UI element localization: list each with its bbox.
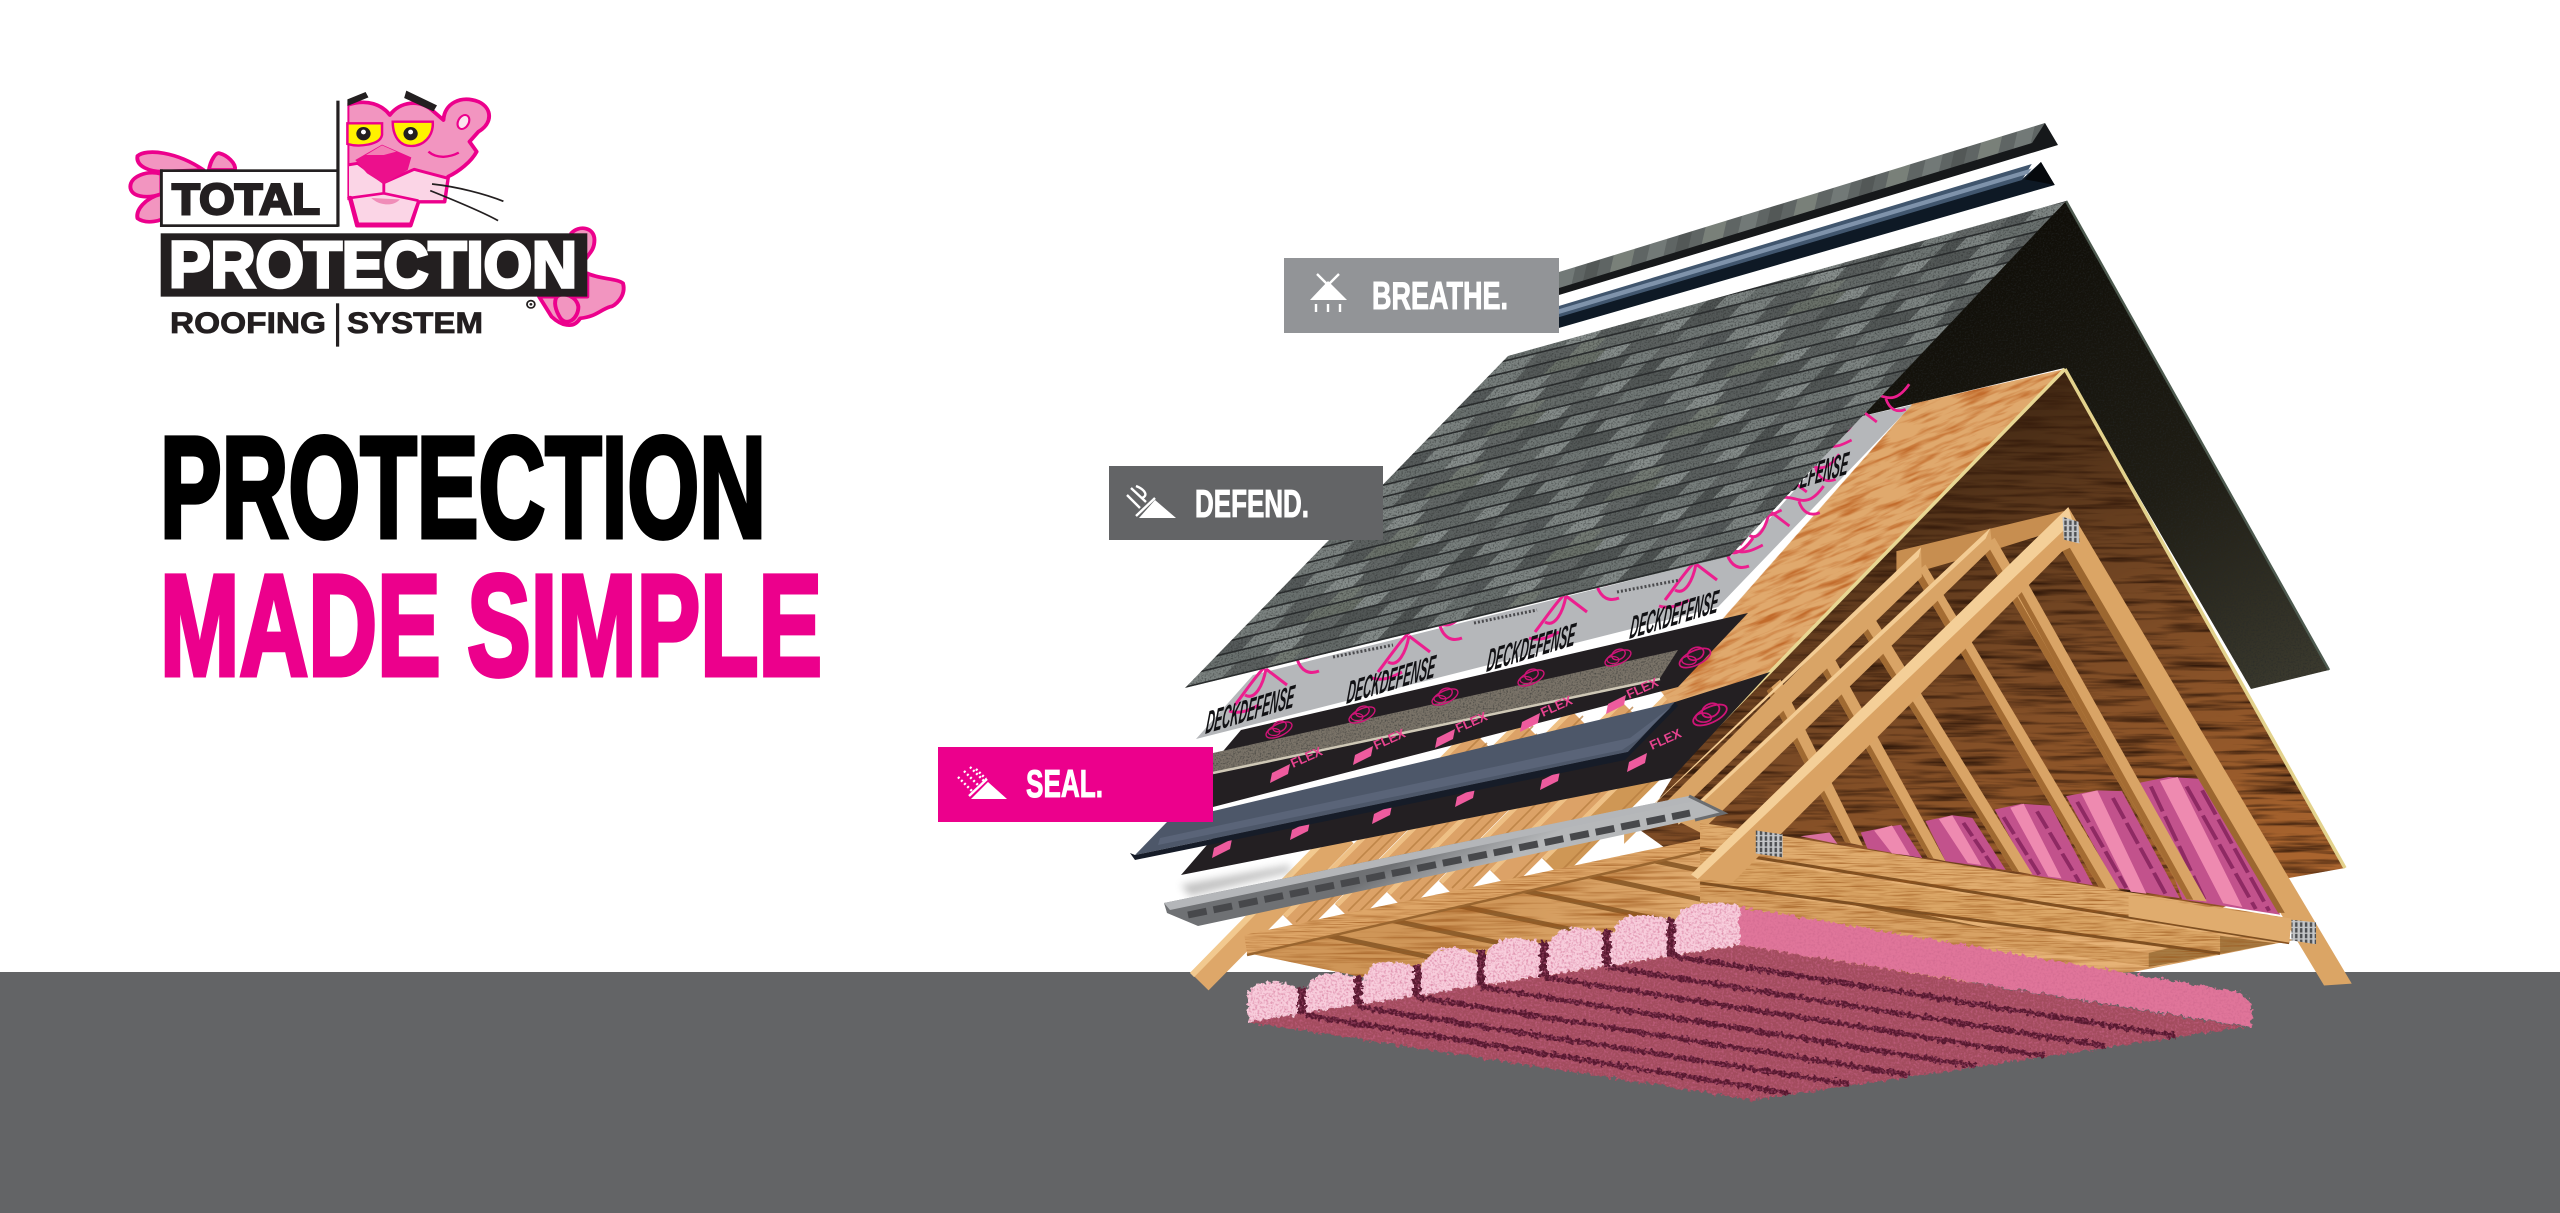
- gable sheathing underside: [1640, 369, 2345, 940]
- underlayment dotted strips: [1333, 580, 1680, 657]
- FLEX text upper: [1288, 674, 1661, 771]
- deck defense underlayment: [1196, 384, 1912, 741]
- panel 1: [2140, 777, 2280, 915]
- front truss left leg: [1691, 507, 2079, 883]
- FLEX text upper: FLEX: [1288, 743, 1325, 771]
- label: DEFEND: [1109, 466, 1383, 540]
- text: SEAL.: SEAL.: [1026, 763, 1103, 806]
- logo: TOTAL box: [160, 101, 340, 227]
- panel 2: [2066, 790, 2180, 898]
- pink underlayment marks: [1229, 384, 1909, 712]
- insulation left scallops: [1248, 903, 1740, 1022]
- FLEX text upper: FLEX: [1538, 692, 1575, 720]
- open rafters: [1192, 541, 1877, 982]
- shingle green edge: [2066, 201, 2329, 670]
- far truss bars: [1767, 603, 2033, 875]
- icon: rain over roof: [958, 767, 1007, 799]
- FLEX text upper: FLEX: [1453, 708, 1490, 736]
- back felt layer: [1858, 201, 2329, 689]
- insulation underside: [1248, 945, 2245, 1100]
- logo: divider: [336, 303, 339, 347]
- underlayment product name: DECKDEFENSE: [1628, 583, 1721, 646]
- panel 5: [1861, 825, 1922, 858]
- logo: PROTECTION bar: [161, 233, 587, 297]
- underlayment product name: [1204, 445, 1851, 741]
- truss 2: [1678, 528, 2207, 901]
- logo text: PROTECTION: PROTECTION: [169, 228, 577, 301]
- FLEX text upper: FLEX: [1624, 674, 1661, 702]
- panel 6: [1800, 832, 1837, 844]
- text: BREATHE.: BREATHE.: [1372, 275, 1508, 318]
- heading: MADE SIMPLE: MADE SIMPLE: [160, 545, 822, 706]
- insulation stems: [1302, 918, 1671, 1014]
- underlayment product name: DECKDEFENSE: [1345, 648, 1438, 711]
- ridge cap shingle strip: [1559, 123, 2058, 295]
- logo: registered mark: [527, 301, 535, 308]
- eave beam shadow line: [1247, 841, 1748, 955]
- blown-in ceiling insulation: [1248, 903, 2252, 1100]
- deck defense underlayment: KDEFENSE: [1781, 445, 1851, 501]
- granular starter strip: [1213, 650, 1678, 772]
- label: SEAL: [938, 747, 1213, 822]
- logo: left paw: [130, 152, 235, 222]
- label: BREATHE: [1284, 258, 1559, 333]
- shingle field: [1185, 201, 2066, 688]
- metal drip edge: [1130, 702, 1678, 860]
- logo text: ROOFING: ROOFING: [170, 307, 326, 340]
- icon: wind over roof: [1127, 486, 1176, 518]
- panel 3: [1995, 804, 2093, 885]
- ceiling underside: [1254, 852, 2292, 988]
- lower membrane rose: [1690, 700, 1730, 730]
- front truss: [1691, 507, 2352, 986]
- underlayment product name: DECKDEFENSE: [1204, 678, 1297, 741]
- logo: right paw: [539, 228, 624, 325]
- pink attic insulation: [1800, 777, 2280, 915]
- far truss bar shadows: [1767, 610, 2019, 872]
- logo: panther face: [343, 91, 503, 228]
- insulation right side: [1740, 907, 2252, 1027]
- heading: PROTECTION: PROTECTION: [160, 407, 766, 568]
- inner bar: [2015, 584, 2207, 901]
- logo text: SYSTEM: SYSTEM: [347, 307, 483, 340]
- lower ice and water membrane: [1181, 672, 1770, 875]
- back truss bars: [1767, 603, 2033, 875]
- FLEX marks lower: [1212, 753, 1647, 858]
- plywood roof deck: [1530, 228, 2195, 885]
- logo: Total Protection Roofing System: [130, 91, 624, 347]
- gable sheathing edge: [2065, 369, 2345, 868]
- metal truss plates: [1756, 517, 2316, 944]
- tie beams: [1700, 823, 2291, 967]
- logo text: TOTAL: TOTAL: [172, 175, 320, 224]
- lower membrane shadow: [1181, 865, 1290, 896]
- lower beam re-cover: [2129, 896, 2291, 943]
- plywood edge: [1700, 369, 2065, 744]
- front truss right leg: [2062, 507, 2352, 986]
- text: DEFEND.: DEFEND.: [1195, 483, 1309, 526]
- truss 3: [1624, 547, 2120, 890]
- underlayment product name: DECKDEFENSE: [1485, 616, 1578, 679]
- intake vent: [1164, 796, 1724, 926]
- upper ice and water membrane: [1213, 613, 1748, 807]
- FLEX marks upper: [1270, 695, 1626, 783]
- panel 4: [1925, 815, 2006, 870]
- grey ground band: [0, 972, 2560, 1213]
- FLEX text upper: FLEX: [1371, 725, 1408, 753]
- ridge vent strip: [1559, 162, 2055, 328]
- membrane roses: [1264, 644, 1713, 741]
- FLEX text lower: FLEX: [1647, 725, 1684, 753]
- icon: breathe: [1310, 274, 1347, 312]
- eave beam: [1244, 832, 1749, 954]
- insulation dark seams: [1305, 956, 2176, 1093]
- ridge board: [1896, 511, 2064, 584]
